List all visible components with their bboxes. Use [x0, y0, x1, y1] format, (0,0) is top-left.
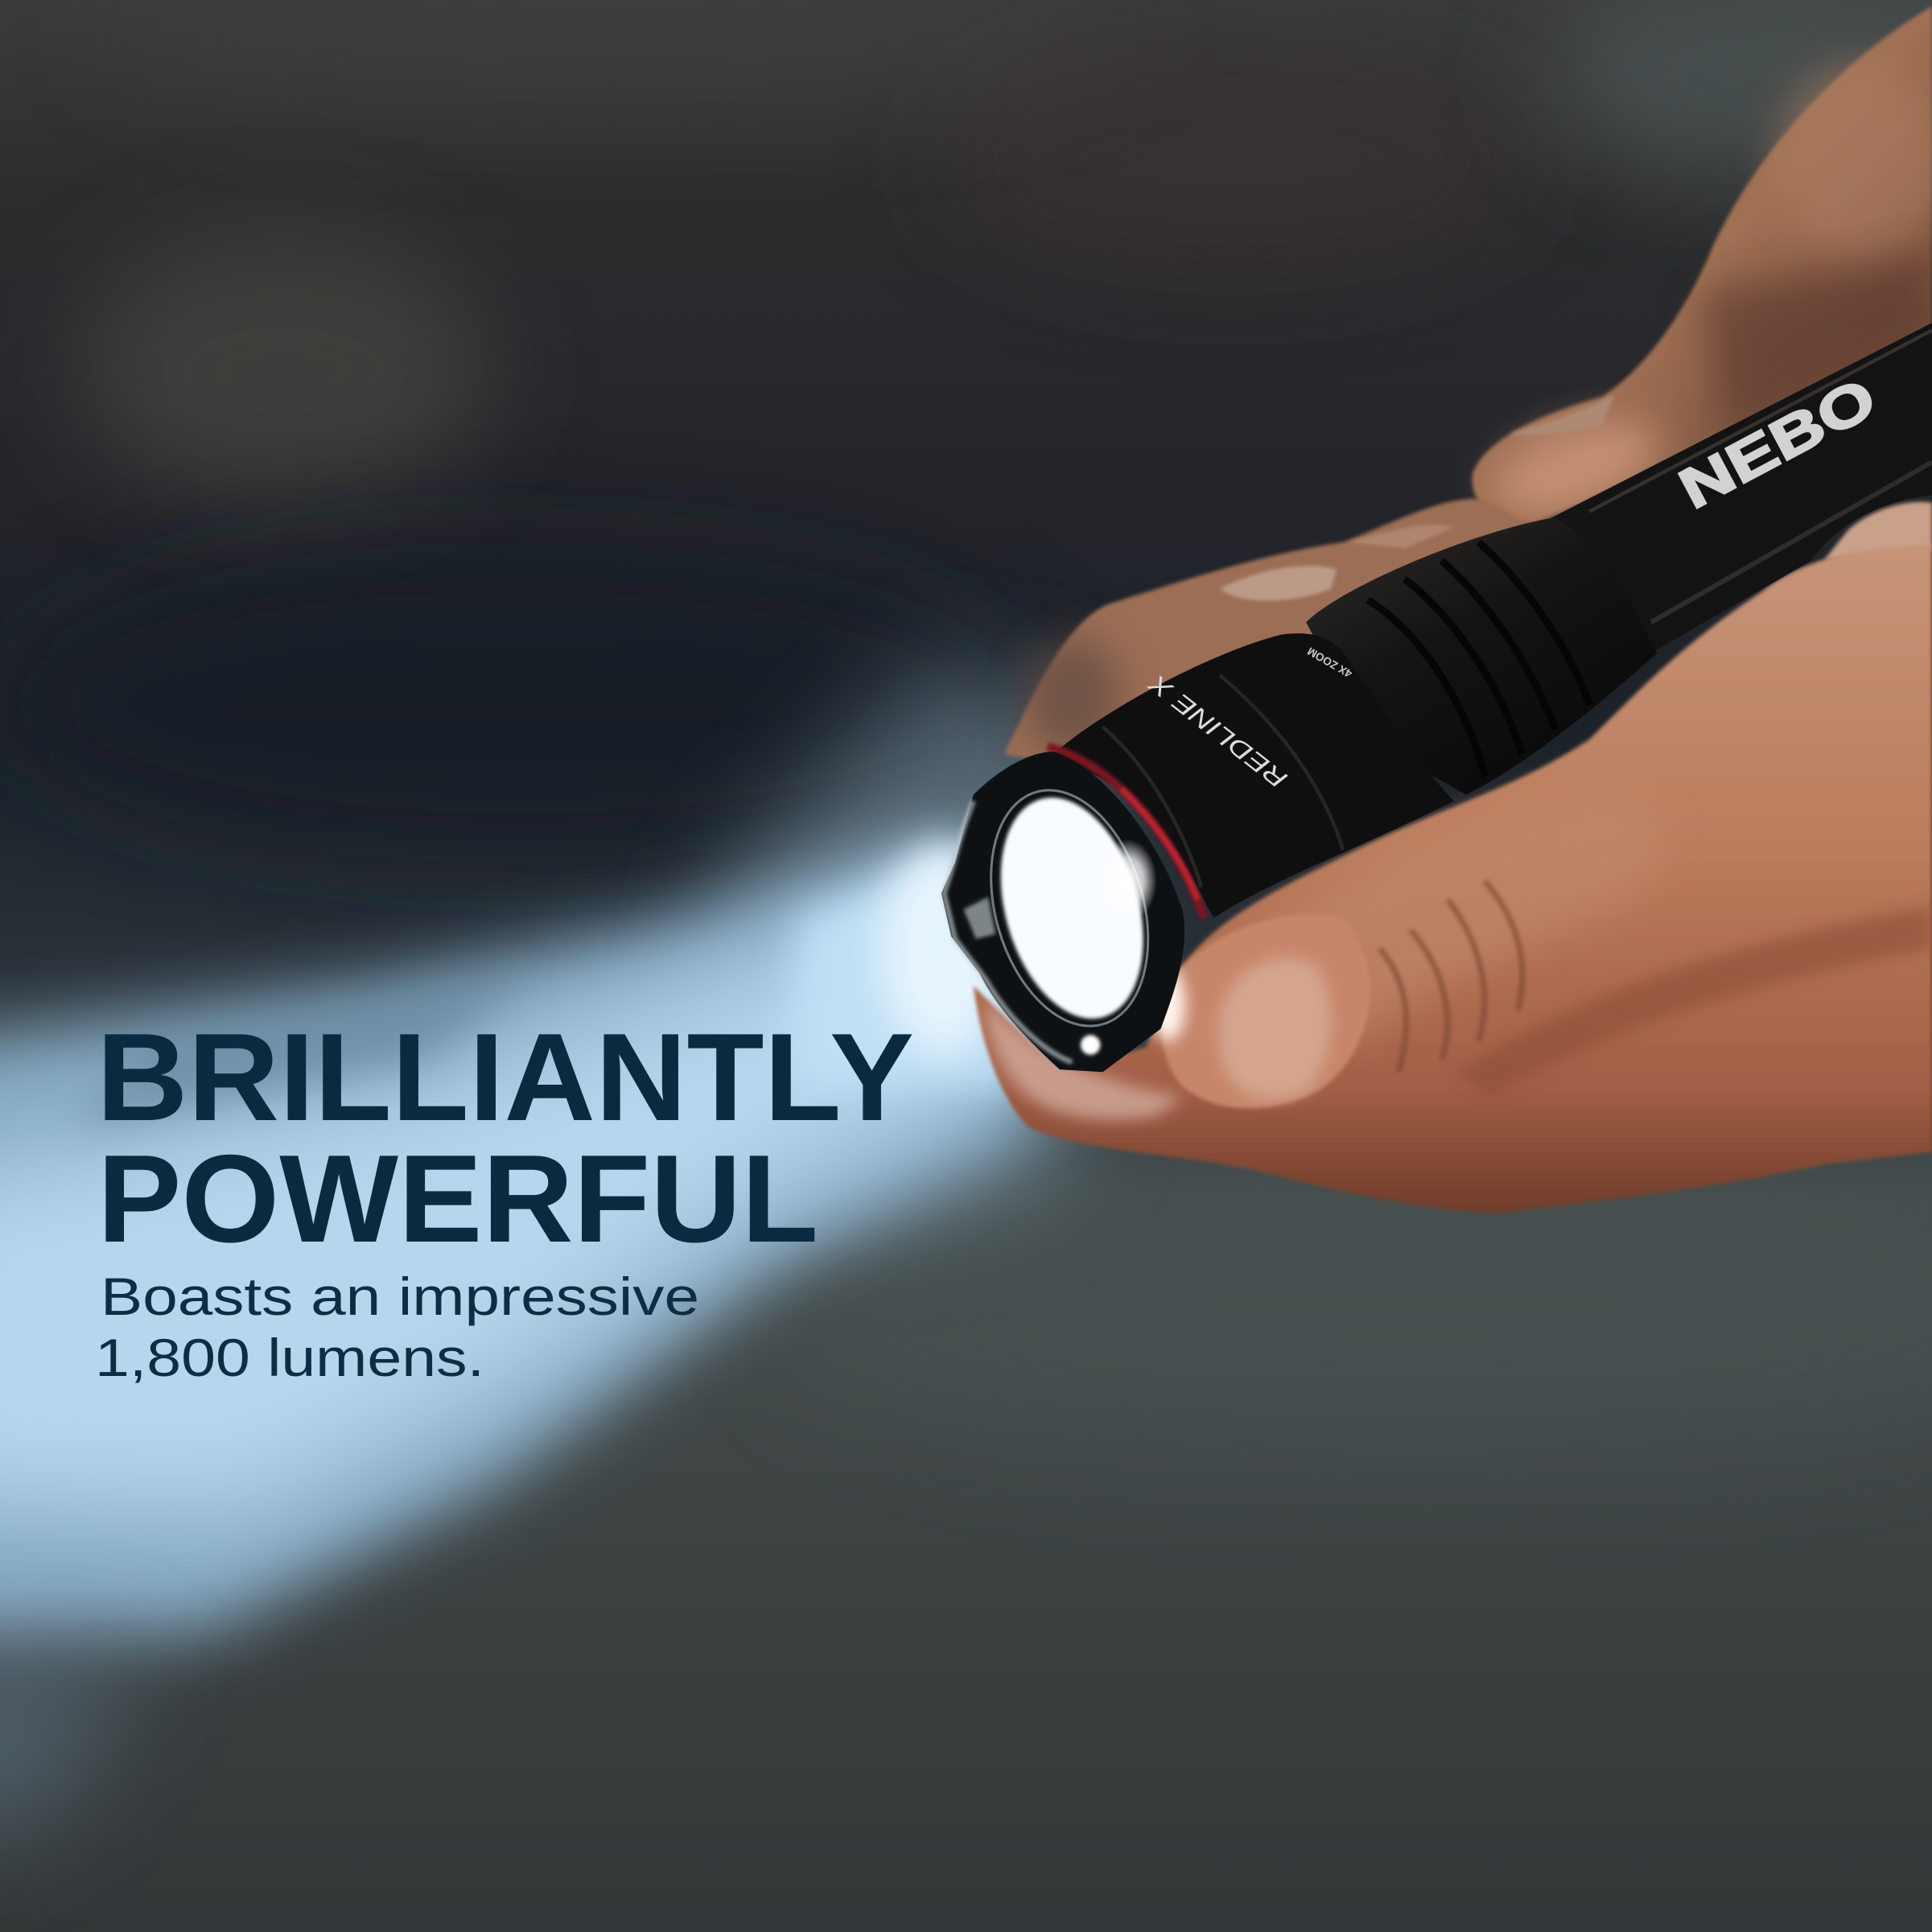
heading: POWERFUL	[97, 1129, 818, 1268]
flashlight: grip collar	[1306, 517, 1658, 795]
flashlight: bezel rim	[941, 752, 1184, 1072]
flashlight: NEBO logo: NEBO	[1669, 365, 1886, 521]
light beam	[0, 665, 1109, 1848]
thumb tip	[1161, 915, 1370, 1108]
flashlight: lens	[977, 781, 1168, 1036]
flashlight	[941, 323, 1932, 1072]
lower lit finger	[986, 998, 1183, 1120]
thumb glow	[1151, 967, 1185, 1041]
hand: fingers behind flashlight	[1004, 499, 1528, 764]
thumb highlight	[1232, 789, 1662, 1048]
thumb knuckle lines	[1380, 881, 1522, 1072]
hand: upper fingers	[1473, 6, 1932, 561]
body text: Boasts an impressive	[101, 1267, 699, 1326]
thumb nail	[1218, 958, 1331, 1099]
body text: 1,800 lumens.	[95, 1328, 484, 1387]
flashlight: Redline X wordmark: REDLINE X	[1143, 669, 1292, 793]
hand: lower palm and thumb	[974, 545, 1932, 1213]
heading	[97, 1007, 914, 1268]
heading: BRILLIANTLY	[97, 1007, 914, 1147]
flashlight: 4X zoom label: 4X ZOOM	[1305, 645, 1354, 680]
body text	[95, 1267, 699, 1387]
flashlight: red ring	[1048, 747, 1204, 918]
flashlight: tail tube	[1528, 323, 1932, 653]
flashlight: zoom head	[1053, 633, 1454, 918]
palm shadow crease	[1454, 906, 1932, 1097]
